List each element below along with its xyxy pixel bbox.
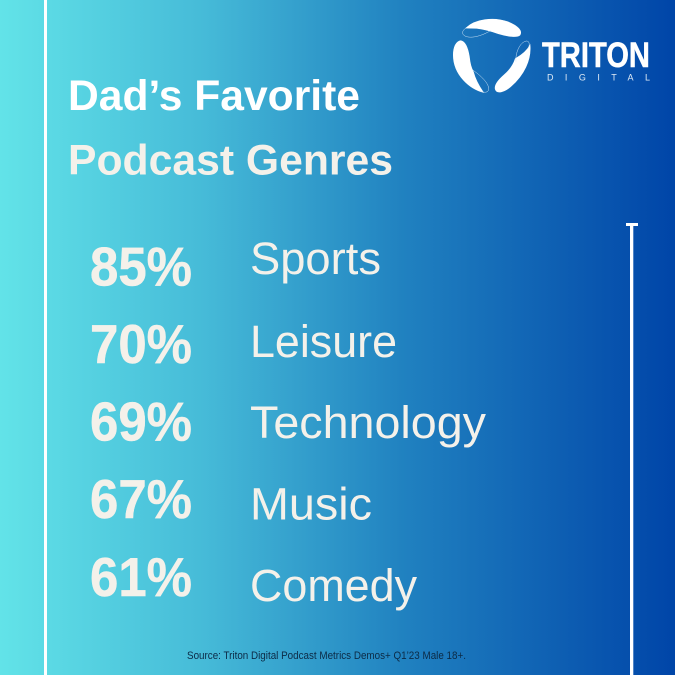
row: leisure (90, 314, 397, 375)
row: leisure: 70% (90, 314, 192, 375)
genre list (90, 233, 486, 611)
row: technology: Technology (250, 397, 486, 448)
icon: triton mark (453, 19, 530, 92)
title (68, 72, 393, 184)
row: comedy (90, 547, 417, 611)
row: music: Music (250, 478, 372, 530)
title line 1: Dad’s Favorite (68, 72, 360, 120)
left vertical line (44, 0, 47, 675)
title line 2: Podcast Genres (68, 136, 393, 184)
row: technology: 69% (90, 392, 192, 452)
source note: Source: Triton Digital Podcast Metrics Demos+ Q1’23 Male 18+. (187, 650, 466, 662)
logo subtext: DIGITAL (547, 72, 650, 82)
logo: Triton Digital (453, 19, 650, 92)
right vertical line with cap (626, 223, 638, 675)
row: music (90, 469, 372, 530)
row: leisure: Leisure (250, 316, 397, 367)
row: music: 67% (90, 469, 192, 530)
row: comedy: 61% (90, 547, 192, 608)
row: sports (90, 233, 381, 298)
row: comedy: Comedy (250, 560, 417, 611)
row: technology (90, 392, 486, 452)
row: sports: 85% (90, 236, 192, 298)
logo wordmark: TRITON (542, 36, 650, 75)
row: sports: Sports (250, 233, 381, 284)
